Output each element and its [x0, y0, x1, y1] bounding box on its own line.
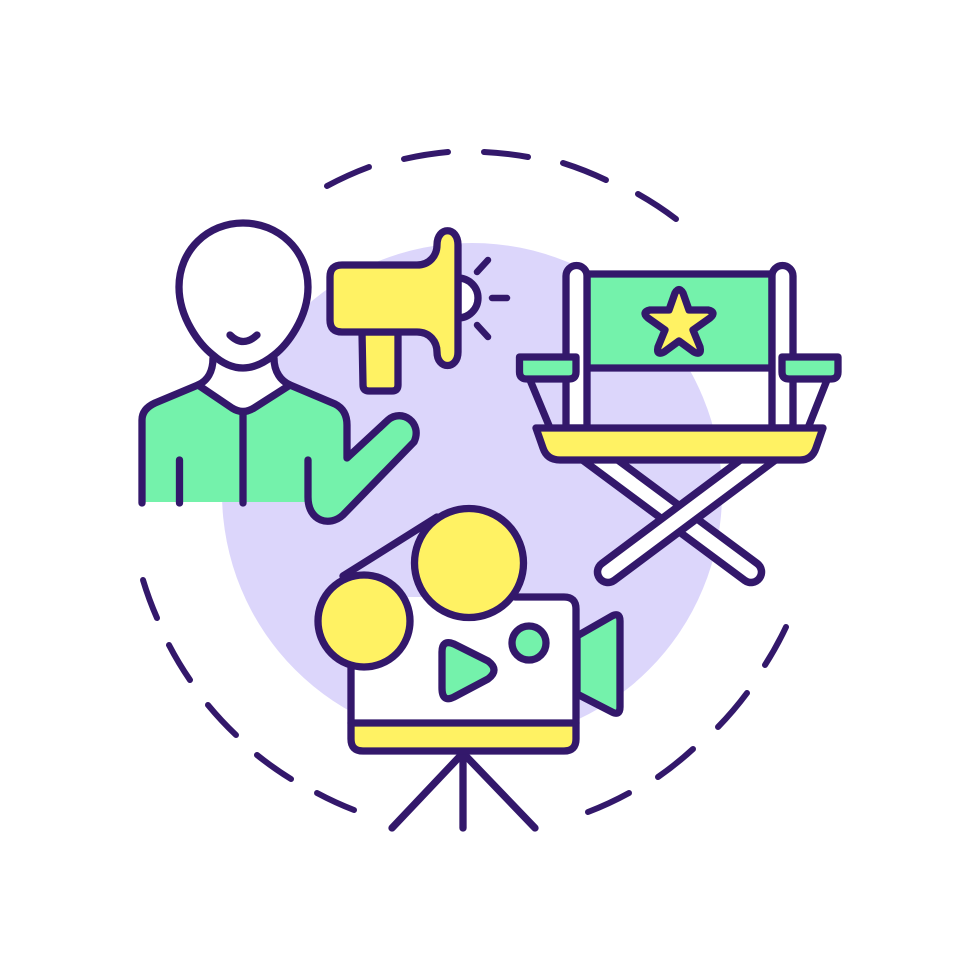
icon: director chair: [520, 266, 838, 572]
green jacket fill: [142, 385, 416, 521]
icon: director person: [142, 223, 416, 521]
icon: megaphone: [330, 231, 507, 391]
seat: [536, 428, 823, 460]
sound rays: [477, 260, 507, 337]
camera body fill: [351, 597, 576, 723]
chair back canvas: [587, 274, 772, 368]
film belt: [343, 517, 437, 576]
jacket seams: [180, 413, 243, 503]
crossed leg front: [608, 445, 778, 572]
camera base strip: [351, 723, 576, 751]
armrest supports: [530, 380, 827, 428]
right post: [772, 266, 793, 428]
megaphone sound bulb: [458, 278, 478, 318]
play button: [442, 643, 494, 699]
jacket outline: [142, 358, 416, 521]
lavender background circle: [222, 243, 722, 743]
megaphone body: [330, 231, 458, 366]
neck: [198, 358, 290, 413]
right armrest: [782, 357, 838, 379]
star: [645, 290, 713, 353]
record light: [512, 626, 546, 660]
head: [179, 223, 308, 368]
icon: film camera: [318, 508, 620, 828]
small film reel: [318, 575, 410, 667]
megaphone handle: [362, 332, 398, 391]
left post: [566, 266, 587, 428]
tripod: [392, 753, 535, 828]
lens hood: [577, 615, 620, 713]
collar: [198, 385, 290, 412]
camera body outline: [351, 597, 576, 723]
large film reel: [414, 508, 524, 618]
smile: [230, 335, 257, 342]
crossed leg back: [580, 445, 751, 572]
left armrest: [520, 357, 576, 379]
dashed ring: [143, 152, 786, 812]
